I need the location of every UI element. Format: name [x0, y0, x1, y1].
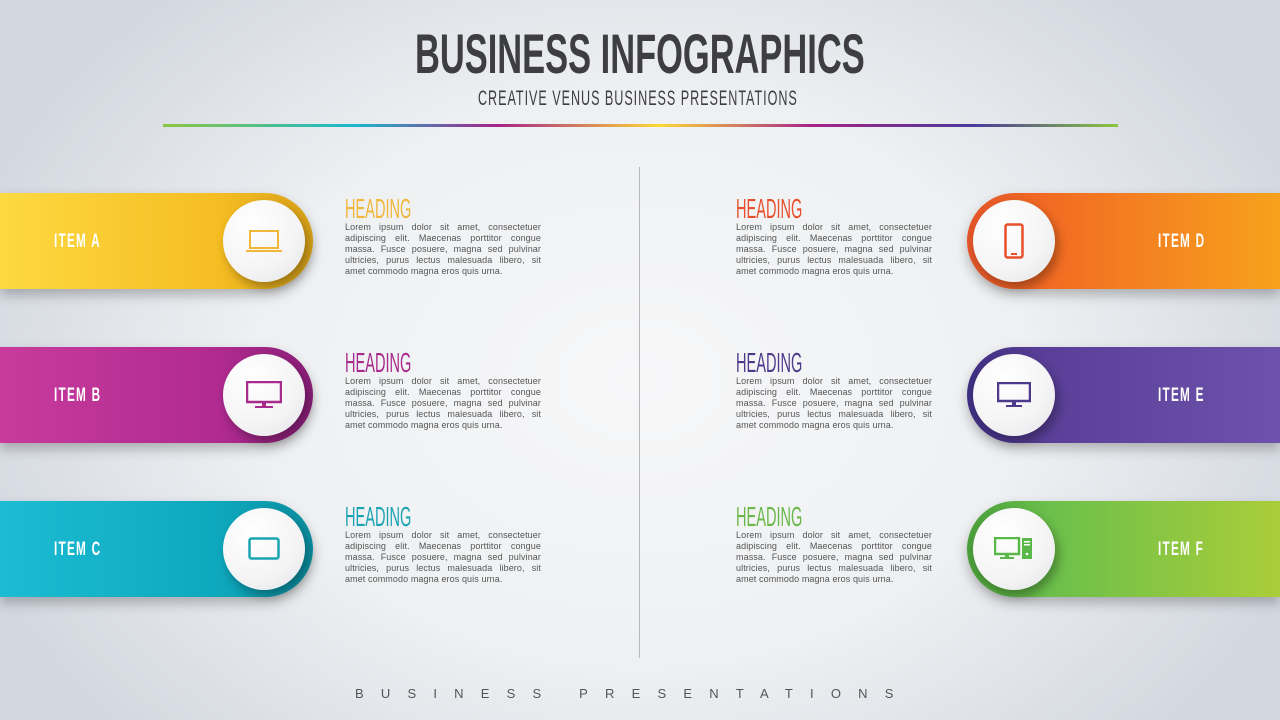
item A bar	[0, 193, 313, 289]
icon: phone	[973, 200, 1055, 282]
text block A: Lorem ipsum dolor sit amet, consectetuer adipiscing elit. Maecenas porttitor congue massa. Fusce posuere, magna sed pulvinar ultricies, purus lectus malesuada libero, sit amet commodo magna eros quis urna.	[345, 222, 541, 276]
text block C	[345, 501, 541, 584]
text block D	[736, 193, 932, 276]
text block B: Lorem ipsum dolor sit amet, consectetuer adipiscing elit. Maecenas porttitor congue massa. Fusce posuere, magna sed pulvinar ultricies, purus lectus malesuada libero, sit amet commodo magna eros quis urna.	[345, 376, 541, 430]
text block A	[345, 193, 541, 276]
center divider	[639, 167, 640, 658]
text block B	[345, 347, 541, 430]
text block C: HEADING	[345, 501, 411, 532]
label A: ITEM A	[54, 231, 101, 252]
text block D: HEADING	[736, 193, 802, 224]
text block A: HEADING	[345, 193, 411, 224]
text block E	[736, 347, 932, 430]
title underline	[163, 124, 1118, 127]
text block F: Lorem ipsum dolor sit amet, consectetuer adipiscing elit. Maecenas porttitor congue massa. Fusce posuere, magna sed pulvinar ultricies, purus lectus malesuada libero, sit amet commodo magna eros quis urna.	[736, 530, 932, 584]
icon: laptop	[223, 200, 305, 282]
label B: ITEM B	[54, 385, 101, 406]
icon: tablet	[223, 508, 305, 590]
item D bar	[967, 193, 1280, 289]
title: BUSINESS INFOGRAPHICS	[415, 22, 865, 85]
footer text: BUSINESS PRESENTATIONS	[355, 686, 911, 701]
text block C: Lorem ipsum dolor sit amet, consectetuer adipiscing elit. Maecenas porttitor congue massa. Fusce posuere, magna sed pulvinar ultricies, purus lectus malesuada libero, sit amet commodo magna eros quis urna.	[345, 530, 541, 584]
item F bar	[967, 501, 1280, 597]
text block E: Lorem ipsum dolor sit amet, consectetuer adipiscing elit. Maecenas porttitor congue massa. Fusce posuere, magna sed pulvinar ultricies, purus lectus malesuada libero, sit amet commodo magna eros quis urna.	[736, 376, 932, 430]
label C: ITEM C	[54, 539, 101, 560]
item E bar	[967, 347, 1280, 443]
label D: ITEM D	[1158, 231, 1205, 252]
text block F: HEADING	[736, 501, 802, 532]
label F: ITEM F	[1158, 539, 1204, 560]
subtitle: CREATIVE VENUS BUSINESS PRESENTATIONS	[478, 87, 798, 110]
text block B: HEADING	[345, 347, 411, 378]
text block F	[736, 501, 932, 584]
item C bar	[0, 501, 313, 597]
item B bar	[0, 347, 313, 443]
icon: monitor	[223, 354, 305, 436]
label E: ITEM E	[1158, 385, 1205, 406]
icon: desktop computer	[973, 508, 1055, 590]
text block E: HEADING	[736, 347, 802, 378]
text block D: Lorem ipsum dolor sit amet, consectetuer adipiscing elit. Maecenas porttitor congue massa. Fusce posuere, magna sed pulvinar ultricies, purus lectus malesuada libero, sit amet commodo magna eros quis urna.	[736, 222, 932, 276]
icon: monitor	[973, 354, 1055, 436]
